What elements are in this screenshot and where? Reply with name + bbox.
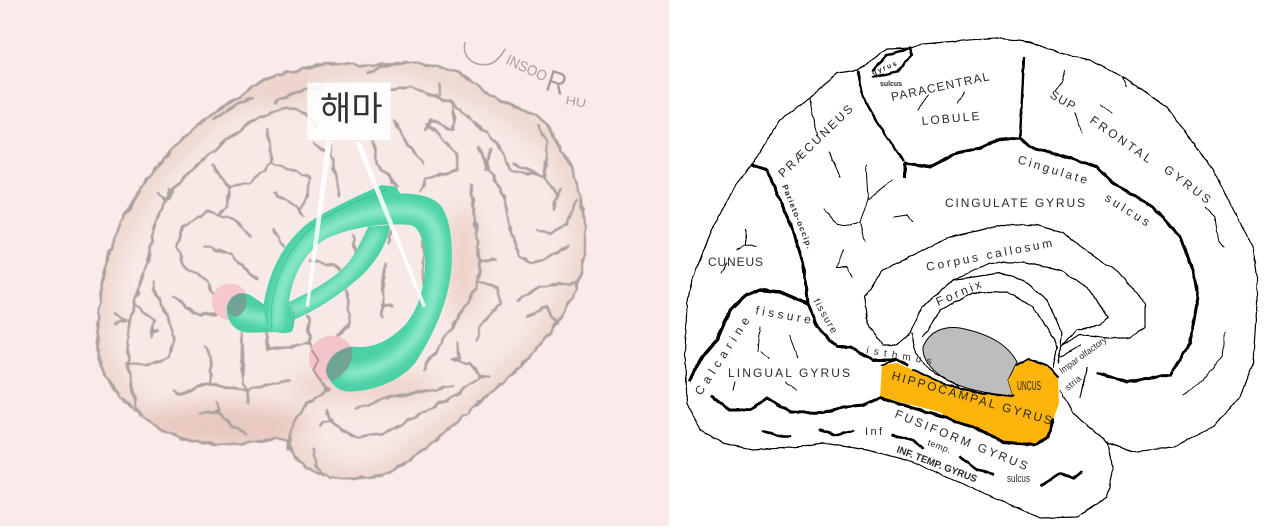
anatomical labels: Calcarine	[692, 314, 753, 398]
anatomical labels: INF. TEMP. GYRUS	[895, 445, 979, 485]
tip overlaps	[227, 293, 352, 381]
label box: 해마	[307, 82, 391, 140]
anatomical labels: CINGULATE GYRUS	[945, 196, 1085, 210]
anatomical labels	[692, 61, 1214, 485]
anatomical labels: PARACENTRAL	[890, 69, 991, 104]
thick sulci	[690, 48, 1198, 485]
label box: 해마: 해마	[320, 82, 383, 131]
anatomical labels: HIPPOCAMPAL GYRUS	[890, 368, 1054, 428]
anatomical labels: LINGUAL GYRUS	[728, 366, 850, 380]
anatomical labels: FUSIFORM GYRUS	[893, 407, 1030, 473]
anatomical labels: sulcus	[1007, 473, 1030, 485]
panel: brain illustration	[90, 43, 593, 487]
anatomical labels: sulcus	[880, 81, 902, 88]
hippocampus: inner tube	[227, 225, 390, 333]
anatomical labels: Cingulate	[1016, 152, 1089, 187]
anatomical labels: UNCUS	[1017, 378, 1041, 393]
anatomical labels: Inf	[865, 426, 883, 438]
anatomical labels: PRÆCUNEUS	[775, 102, 856, 180]
outer contour	[685, 38, 1257, 518]
signature: HU	[564, 93, 587, 111]
panel: medial brain diagram	[685, 38, 1257, 518]
anatomical labels: stria	[1063, 373, 1083, 393]
anatomical labels: Parieto-occip.	[780, 183, 814, 250]
anatomical labels: fissure	[754, 303, 812, 327]
anatomical labels: Fornix	[934, 277, 983, 309]
anatomical labels: CUNEUS	[708, 255, 763, 269]
signature: R	[542, 64, 571, 102]
anatomical labels: GYRUS	[1161, 162, 1214, 206]
anatomical labels: FRONTAL	[1087, 113, 1155, 166]
hippocampus: main arc	[263, 185, 452, 392]
anatomical labels: fissure	[810, 297, 839, 336]
gray thalamus region	[923, 328, 1017, 396]
leader lines	[306, 142, 426, 307]
anatomical labels: temp.	[926, 437, 952, 455]
anatomical labels: Corpus callosum	[925, 236, 1053, 274]
signature: INSOO	[503, 52, 549, 85]
anatomical labels: sulcus	[1102, 191, 1152, 229]
anatomical labels: SUP	[1048, 87, 1078, 113]
anatomical labels: gyrus	[871, 61, 898, 77]
panel: left background	[0, 0, 669, 526]
callosum and fornix lines	[865, 225, 1145, 443]
anatomical labels: LOBULE	[921, 109, 980, 128]
brain body	[90, 50, 593, 487]
minor sulci	[721, 70, 1225, 395]
anatomical labels: Impar olfactory	[1057, 334, 1109, 376]
pink tips behind hippocampus	[212, 283, 354, 381]
signature	[464, 43, 587, 111]
orange hippocampal gyrus and uncus	[880, 359, 1059, 445]
brain outline and sulci	[98, 62, 586, 479]
anatomical labels: isthmus	[865, 345, 932, 367]
